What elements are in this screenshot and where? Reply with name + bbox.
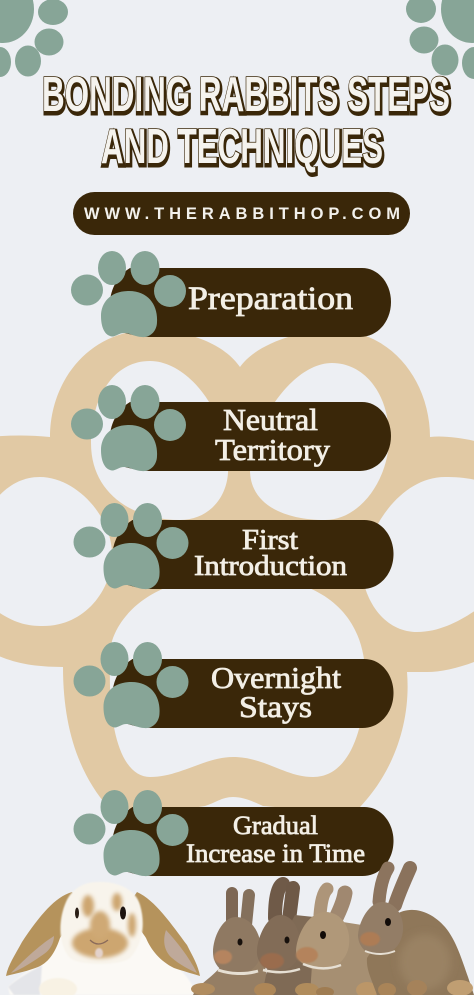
step 2: neutral territory: Territory (215, 432, 331, 467)
step 3: first introduction (74, 503, 394, 589)
left ear (6, 892, 82, 976)
step 5: gradual increase in time: Gradual (233, 811, 318, 840)
icon: corner paw top right (406, 0, 474, 79)
website pill: WWW.THERABBITHOP.COM (84, 205, 400, 223)
step 4: overnight stays (74, 642, 394, 728)
step 3: first introduction: First (242, 524, 298, 556)
rabbit 2 (254, 884, 330, 995)
right ear (128, 892, 200, 976)
rabbit 3 (295, 889, 380, 995)
step 2: neutral territory (71, 385, 391, 471)
step 1: preparation: Preparation (188, 281, 353, 317)
step 3: first introduction: Introduction (194, 551, 347, 582)
step 5: gradual increase in time: Increase in Time (186, 839, 365, 868)
step 2: neutral territory: Neutral (223, 402, 318, 437)
rabbit 4 (358, 868, 474, 995)
step 4: overnight stays: Stays (239, 689, 312, 724)
step 4: overnight stays: Overnight (211, 660, 341, 695)
illustration: four brown rabbits (191, 868, 474, 995)
website pill (73, 192, 410, 235)
head (60, 882, 143, 964)
step 5: gradual increase in time (74, 790, 394, 876)
tan face markings (72, 928, 128, 958)
rabbit body (8, 925, 197, 995)
large tan paw outline (0, 330, 474, 811)
title (42, 68, 451, 176)
step 1: preparation (71, 251, 391, 337)
rabbit 1 (191, 893, 270, 995)
illustration: lop-eared rabbit (6, 882, 200, 995)
icon: corner paw top left (0, 0, 68, 77)
front paw (39, 978, 77, 995)
